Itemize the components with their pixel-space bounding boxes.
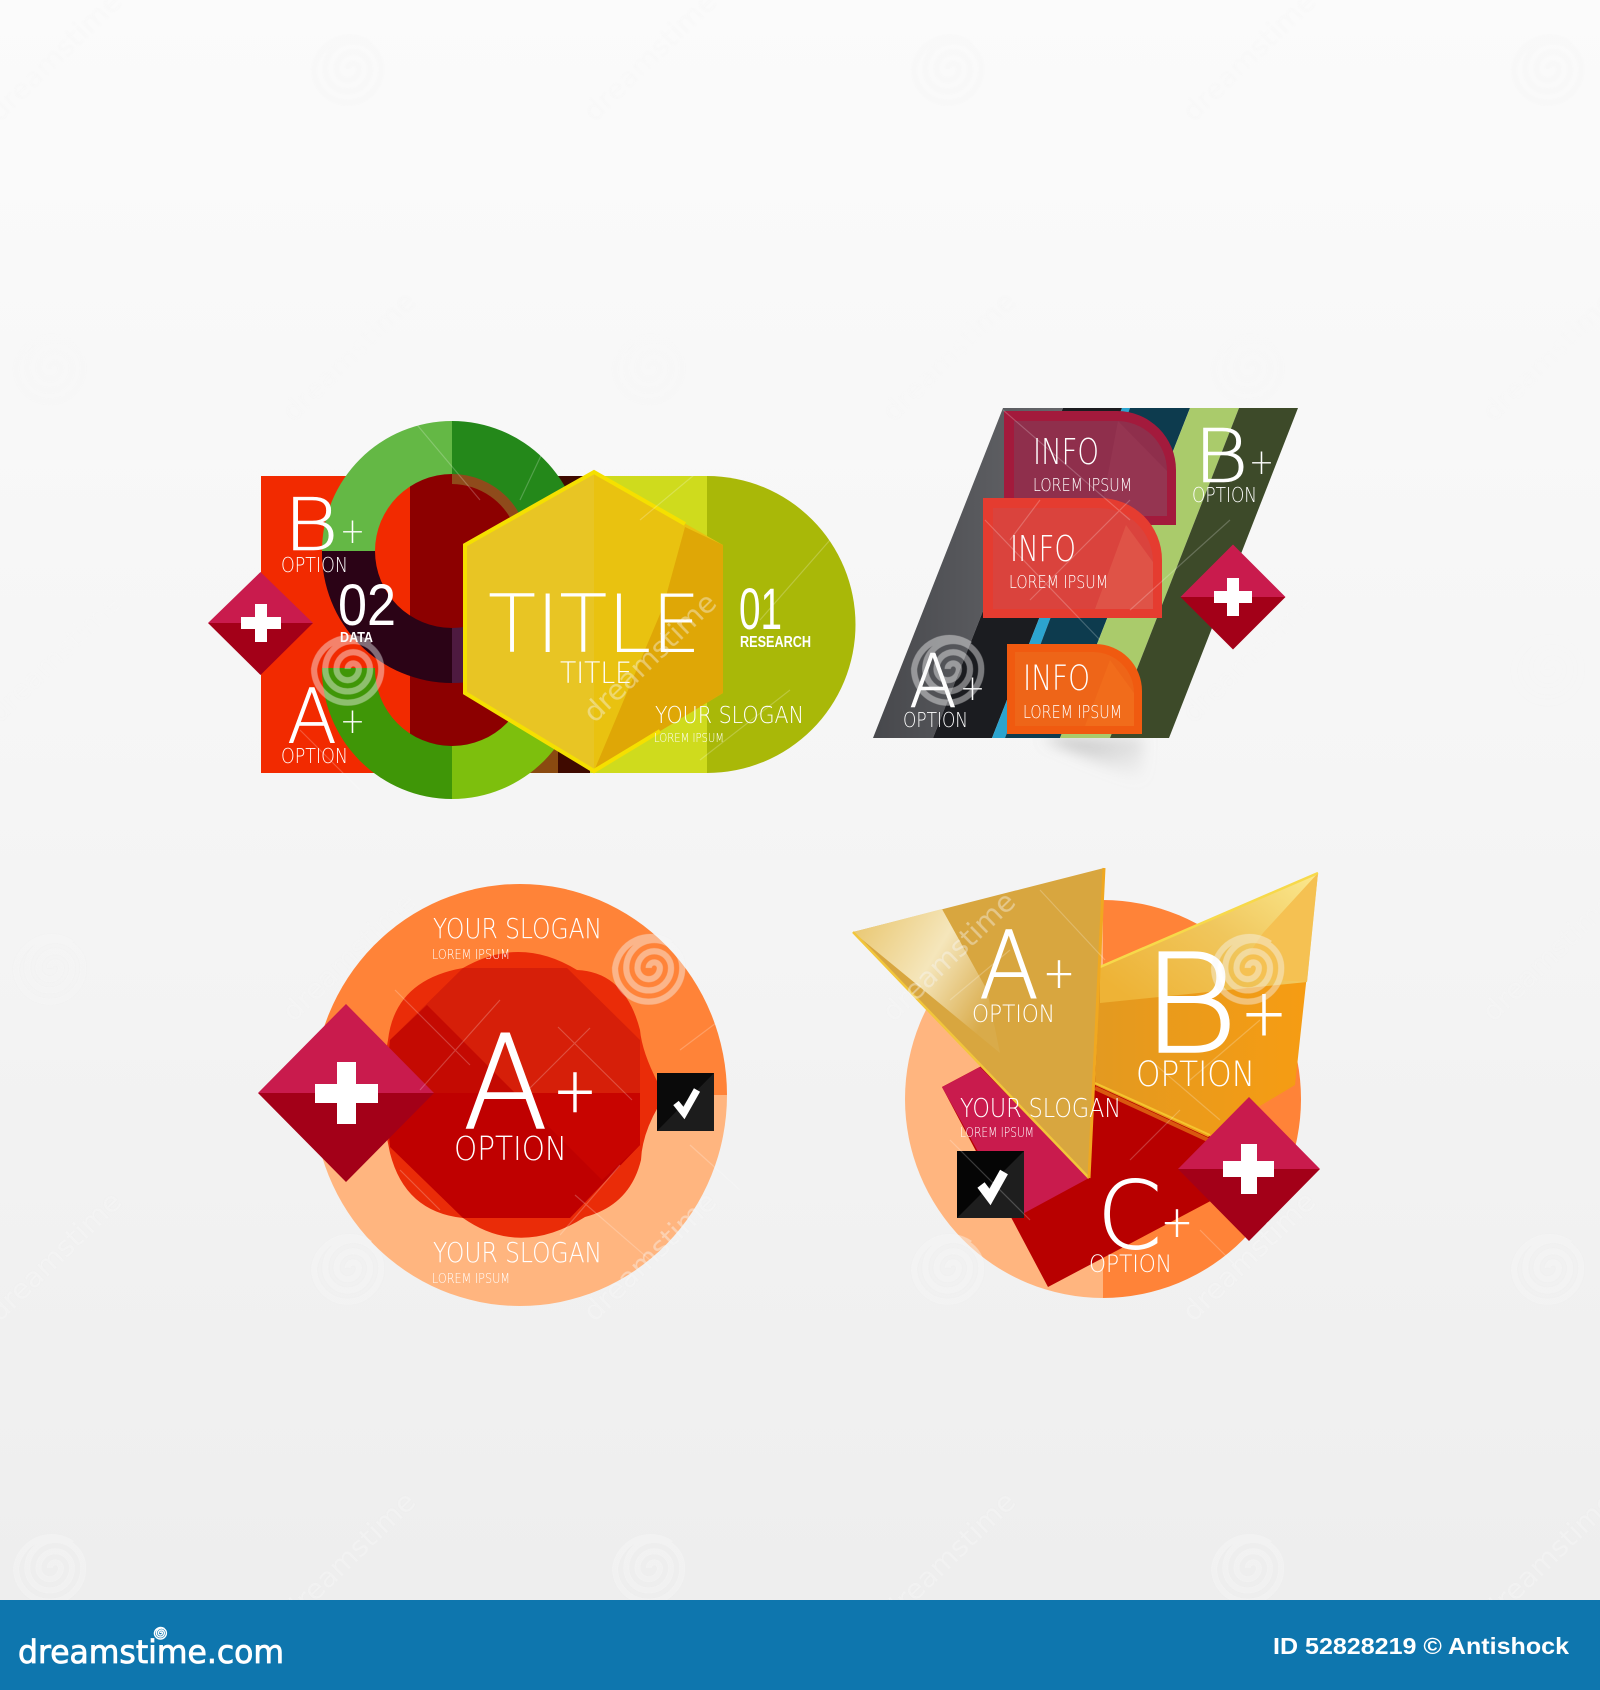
label: B+: B: [283, 483, 339, 567]
label: A+: +: [960, 668, 985, 709]
ring dark lower right: [452, 551, 582, 683]
label: A+: OPTION: [281, 744, 348, 768]
info tab 3: INFO: [1023, 659, 1090, 699]
hexagon left half: [465, 472, 594, 771]
stripe blue: [992, 408, 1130, 738]
label: A+: [903, 639, 985, 732]
stripe green: [1060, 408, 1239, 738]
panel: striped parallelogram with info tabs: [873, 408, 1298, 782]
brown strip lower right: [528, 730, 558, 773]
footer bar: [0, 1600, 1600, 1690]
panel: orange circle badge: [258, 884, 727, 1306]
slogan text: LOREM IPSUM: [654, 731, 724, 745]
footer logo: dreamstime.com: [18, 1633, 284, 1671]
label: B+: OPTION: [1136, 1055, 1255, 1095]
blob flower outline: [378, 952, 661, 1238]
brown inner shadows: [452, 474, 525, 528]
grade A+: A: [463, 1007, 548, 1159]
icon: plus diamond: [1180, 544, 1286, 650]
triangle A: [853, 868, 1104, 1178]
grade A+: [454, 1007, 597, 1168]
inner ring fill top: [374, 473, 530, 629]
label: B+: +: [1249, 442, 1274, 483]
slogan text: LOREM IPSUM: [960, 1126, 1034, 1141]
label: B+: OPTION: [281, 553, 348, 577]
label: A+: A: [979, 912, 1039, 1021]
circle top half: [313, 884, 727, 1095]
label: B+: [281, 483, 365, 577]
label: C+: [1089, 1162, 1193, 1278]
label: C+: OPTION: [1089, 1250, 1172, 1278]
inner ring fill bottom: [374, 590, 530, 746]
label: A+: [972, 912, 1075, 1028]
label: A+: A: [287, 672, 337, 761]
triangle B upper band: [1100, 873, 1318, 1003]
hexagon: [465, 472, 723, 771]
watermark text: dreamstime: [875, 885, 1022, 1028]
hexagon darker glass: [594, 527, 723, 771]
slogan text: [654, 703, 804, 745]
ring top right: [452, 421, 582, 551]
label: C+: C: [1097, 1162, 1162, 1271]
label: A+: +: [340, 701, 365, 742]
label: 02 data: DATA: [340, 629, 373, 646]
info tab 3: LOREM IPSUM: [1023, 702, 1122, 723]
watermark text: dreamstime: [875, 285, 1022, 428]
soft shadow under panel: [1043, 738, 1143, 782]
title text: TITLE: [488, 578, 701, 671]
icon: plus diamond: [258, 1004, 434, 1182]
watermark text: dreamstime: [275, 1485, 422, 1628]
label: A+: +: [1043, 948, 1075, 999]
label: B+: [1192, 414, 1274, 507]
icon: check box: [957, 1151, 1024, 1218]
label: B+: +: [1241, 977, 1287, 1051]
ring dark lower left: [322, 551, 452, 683]
triangle B lower body: [1095, 873, 1318, 1137]
slogan bottom: LOREM IPSUM: [432, 1271, 510, 1287]
stripe black: [933, 408, 1122, 738]
slogan text: [960, 1094, 1121, 1141]
stripe teal: [1005, 408, 1190, 738]
label: 01 research: 01: [739, 577, 782, 642]
hexagon right half: [594, 472, 723, 771]
triangle B top edge: [1100, 873, 1318, 967]
label: B+: +: [340, 511, 365, 552]
info tab 2: INFO: [1010, 529, 1076, 570]
label: C+: +: [1161, 1197, 1193, 1248]
triangle B: [1095, 873, 1318, 1140]
grade A+: OPTION: [454, 1129, 567, 1168]
icon: check box: [657, 1073, 714, 1131]
slogan top: YOUR SLOGAN: [433, 912, 602, 945]
blob fold lower right: [515, 1093, 640, 1180]
circle right half: [1103, 900, 1301, 1298]
panel: triangles on circle badge: [853, 868, 1320, 1298]
label: A+: OPTION: [903, 708, 968, 732]
crimson section: [942, 1067, 1089, 1218]
blob inner bottom: [385, 1093, 640, 1218]
watermark text: dreamstime: [875, 1485, 1022, 1628]
info tab 1: INFO: [1033, 432, 1099, 473]
stripe gray: [873, 408, 1063, 738]
rotated red rectangle: [942, 987, 1237, 1287]
info tab 2: LOREM IPSUM: [1009, 572, 1108, 593]
stripe olive: [1110, 408, 1298, 738]
label: A+: A: [909, 639, 957, 725]
blob inner top: [385, 968, 640, 1093]
label: 01 research: RESEARCH: [740, 634, 811, 651]
grade A+: +: [553, 1054, 597, 1127]
slogan top: [432, 912, 602, 963]
red rectangle backing: [261, 476, 601, 773]
info tab 2: [983, 498, 1162, 618]
watermark text: dreamstime: [275, 285, 422, 428]
watermark text: dreamstime: [576, 1185, 723, 1328]
panel: title badge with ring and hexagon: [208, 421, 855, 799]
subtitle text: TITLE: [560, 656, 632, 690]
icon: plus diamond: [208, 572, 313, 675]
watermark text: dreamstime: [1175, 1185, 1322, 1328]
label: B+: B: [1141, 926, 1239, 1085]
green pill light section: [590, 476, 707, 773]
dark strip behind ring: [410, 476, 600, 773]
ring top left: [322, 421, 452, 551]
watermark text: dreamstime: [576, 586, 723, 729]
red left part: [261, 476, 410, 773]
watermark text: dreamstime: [275, 885, 422, 1028]
slogan text: YOUR SLOGAN: [655, 703, 804, 729]
footer credit: ID 52828219 © Antishock: [1273, 1633, 1569, 1659]
label: 02 data: 02: [338, 573, 396, 638]
ring bottom right: [452, 668, 582, 799]
slogan bottom: YOUR SLOGAN: [433, 1236, 602, 1269]
info tab 1: [1004, 411, 1176, 525]
olive pill end: [707, 476, 855, 773]
blob fold top left: [385, 1005, 515, 1093]
ring bottom left: [322, 668, 452, 799]
triangle B right facet: [1233, 873, 1318, 982]
triangle B bottom edges: [1095, 1088, 1208, 1140]
slogan bottom: [432, 1236, 602, 1287]
icon: plus diamond: [1178, 1097, 1320, 1241]
slogan text: YOUR SLOGAN: [960, 1094, 1121, 1124]
label: A+: [281, 672, 365, 768]
info tab 1: LOREM IPSUM: [1033, 475, 1132, 496]
hexagon outline: [465, 472, 685, 771]
circle bottom half: [313, 1095, 727, 1306]
watermark text: dreamstime: [1175, 586, 1322, 729]
info tab 3: [1007, 644, 1142, 734]
slogan top: LOREM IPSUM: [432, 947, 510, 963]
label: A+: OPTION: [972, 1000, 1055, 1028]
label: B+: [1136, 926, 1287, 1095]
label: B+: B: [1193, 414, 1249, 500]
label: B+: OPTION: [1192, 483, 1257, 507]
circle left half: [905, 900, 1103, 1298]
